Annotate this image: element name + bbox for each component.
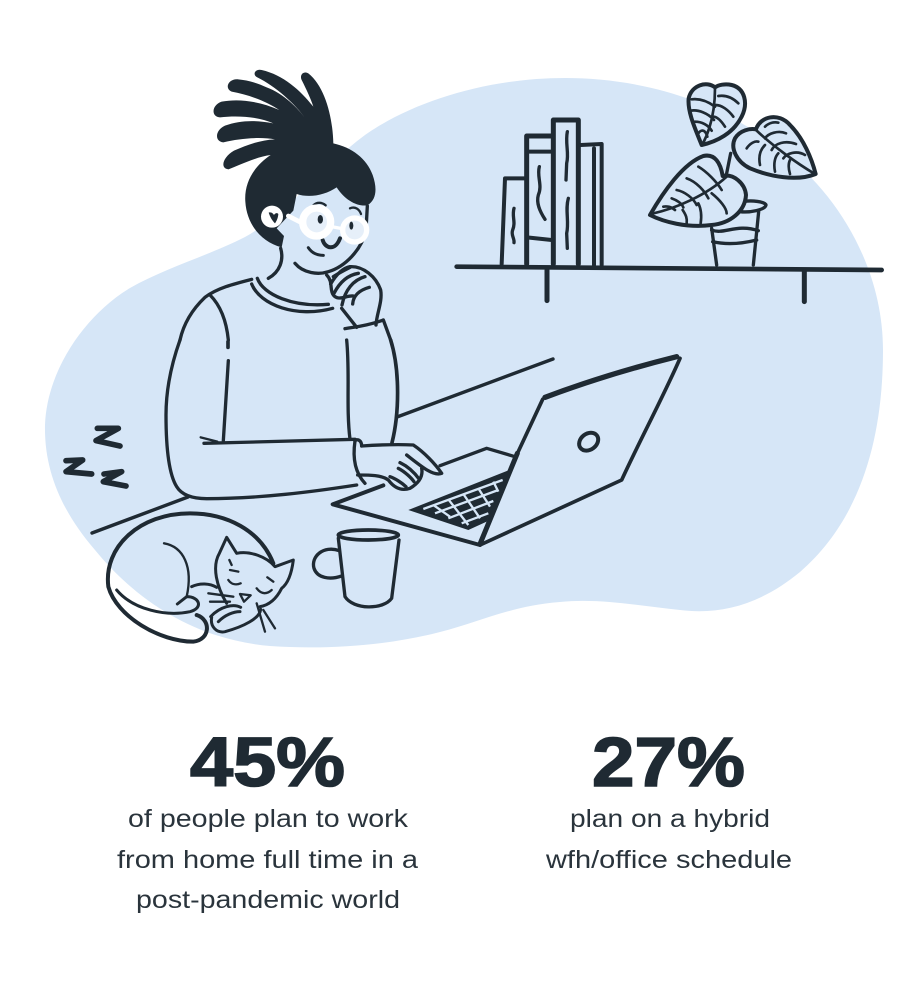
caption 27% bbox=[545, 805, 792, 874]
caption 27%: wfh/office schedule bbox=[545, 846, 792, 874]
pot bbox=[712, 201, 766, 265]
hair bbox=[214, 70, 375, 247]
glasses bbox=[288, 208, 367, 242]
cat head bbox=[216, 537, 293, 607]
stat: 27% bbox=[545, 723, 792, 874]
lenses bbox=[303, 208, 331, 236]
potted plant bbox=[650, 84, 816, 265]
caption 27%: plan on a hybrid bbox=[570, 805, 770, 833]
sweater and raised hand bbox=[180, 267, 391, 340]
caption 45%: post-pandemic world bbox=[136, 886, 400, 914]
stem bbox=[727, 153, 731, 173]
sleeping cat bbox=[108, 513, 293, 642]
sleep icon: zzz bbox=[66, 428, 126, 486]
bookshelf with books bbox=[457, 120, 882, 302]
desk edge bbox=[92, 359, 553, 533]
illustration: woman at laptop bbox=[166, 70, 442, 499]
background blob bbox=[45, 78, 883, 647]
number 45%: 45% bbox=[190, 723, 345, 801]
leaf right bbox=[733, 117, 816, 178]
caption 45%: of people plan to work bbox=[128, 805, 409, 833]
caption 45% bbox=[117, 805, 418, 914]
number 27%: 27% bbox=[592, 723, 745, 801]
leaf left bbox=[650, 156, 746, 226]
coffee mug bbox=[313, 530, 399, 607]
leaf top bbox=[689, 84, 745, 145]
stat: 45% bbox=[117, 723, 418, 914]
caption 45%: from home full time in a bbox=[117, 846, 418, 874]
face and glasses bbox=[261, 203, 367, 278]
arm and torso bbox=[166, 340, 442, 499]
ear bbox=[261, 206, 283, 228]
laptop bbox=[333, 357, 680, 545]
keyboard bbox=[408, 470, 509, 530]
